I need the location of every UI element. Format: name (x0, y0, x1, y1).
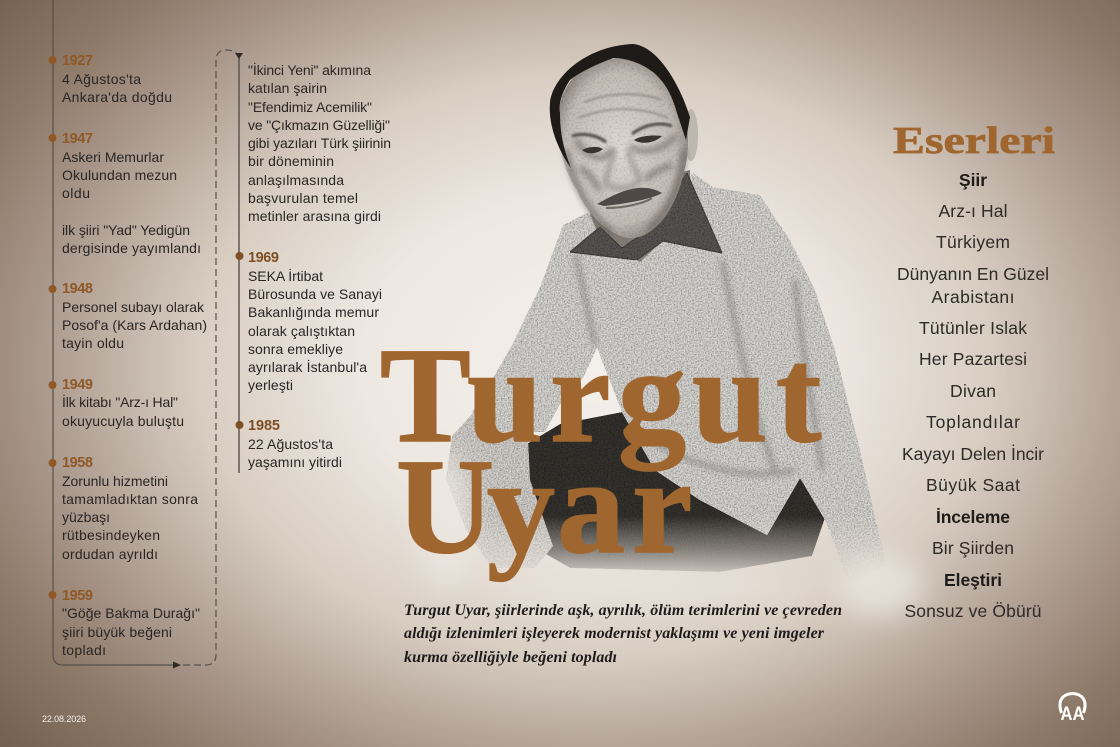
1958 entry: 1958 (62, 455, 93, 471)
study works (932, 507, 1014, 558)
poetry works: Divan (950, 381, 996, 401)
1969 entry: 1969 (248, 250, 279, 266)
1985 entry (248, 418, 342, 470)
1947 entry: dergisinde yayımlandı (62, 240, 201, 256)
criticism works (904, 570, 1042, 621)
1959 entry: "Göğe Bakma Durağı" (62, 605, 200, 621)
poetry works: Arabistanı (932, 287, 1014, 307)
sweater (472, 173, 886, 585)
1949 entry: 1949 (62, 377, 93, 393)
title line: Turgut: Turgut (380, 321, 821, 471)
1948 entry: tayin oldu (62, 335, 124, 351)
sweater folds (575, 255, 822, 474)
poetry works: Şiir (959, 170, 987, 190)
criticism works: Eleştiri (944, 570, 1002, 590)
brows and eyes (572, 124, 672, 142)
1958 entry (62, 455, 198, 562)
1949 entry (62, 377, 184, 429)
1958 entry: Zorunlu hizmetini (62, 473, 168, 489)
1959 entry: şiiri büyük beğeni (62, 624, 172, 640)
1959 entry: topladı (62, 642, 106, 658)
1969 entry: SEKA İrtibat (248, 267, 323, 284)
Ikinci Yeni paragraph: "İkinci Yeni" akımına (248, 61, 371, 78)
ear (687, 109, 698, 161)
Ikinci Yeni paragraph: gibi yazıları Türk şiirinin (248, 135, 391, 151)
1947 entry: ilk şiiri "Yad" Yedigün (62, 222, 190, 238)
hand and knee (446, 412, 553, 568)
1969 entry: olarak çalıştıktan (248, 323, 355, 339)
1969 entry: Bürosunda ve Sanayi (248, 286, 382, 302)
works list (893, 120, 1055, 621)
poetry works: Dünyanın En Güzel (897, 264, 1049, 284)
1927 entry: 1927 (62, 53, 93, 69)
face shading (566, 135, 684, 232)
moustache (597, 188, 662, 206)
Ikinci Yeni paragraph: başvurulan temel (248, 190, 358, 206)
1948 entry: 1948 (62, 281, 93, 297)
1985 entry: 22 Ağustos'ta (248, 436, 333, 452)
poetry works (897, 170, 1049, 495)
poetry works: Türkiyem (936, 232, 1010, 252)
portrait photo of Turgut Uyar (446, 44, 886, 585)
1948 entry: Personel subayı olarak (62, 299, 205, 315)
1958 entry: ordudan ayrıldı (62, 546, 158, 562)
Ikinci Yeni paragraph: katılan şairin (248, 80, 327, 96)
1949 entry: okuyucuyla buluştu (62, 413, 184, 429)
main title (380, 321, 821, 582)
timeline dots (48, 56, 244, 599)
1958 entry: yüzbaşı (62, 509, 110, 525)
poetry works: Her Pazartesi (919, 349, 1027, 369)
poetry works: Büyük Saat (926, 475, 1020, 495)
timeline left column (62, 53, 207, 658)
summary text: aldığı izlenimleri işleyerek modernist yaklaşımı ve yeni imgeler (404, 625, 825, 642)
1969 entry (248, 250, 382, 393)
Ikinci Yeni paragraph: ve "Çıkmazın Güzelliği" (248, 117, 390, 133)
1949 entry: İlk kitabı "Arz-ı Hal" (62, 393, 178, 410)
neck (585, 170, 690, 262)
1947 entry: 1947 (62, 131, 93, 147)
trousers (525, 412, 826, 572)
1927 entry: Ankara'da doğdu (62, 89, 172, 105)
Ikinci Yeni paragraph: anlaşılmasında (248, 172, 344, 188)
1985 entry: yaşamını yitirdi (248, 454, 342, 470)
poetry works: Arz-ı Hal (938, 201, 1008, 221)
1947 entry: Askeri Memurlar (62, 149, 164, 165)
Ikinci Yeni paragraph: bir döneminin (248, 153, 334, 169)
1959 entry: 1959 (62, 588, 93, 604)
timeline connector (53, 0, 243, 668)
icon: AA logo: AA (1060, 704, 1085, 725)
forehead lines (578, 94, 668, 118)
1947 entry (62, 131, 201, 256)
summary text: Turgut Uyar, şiirlerinde aşk, ayrılık, ölüm terimlerini ve çevreden (404, 602, 842, 619)
1927 entry: 4 Ağustos'ta (62, 71, 141, 87)
1947 entry: oldu (62, 185, 90, 201)
poetry works: Tütünler Islak (919, 318, 1027, 338)
summary text: kurma özelliğiyle beğeni topladı (404, 649, 617, 666)
1959 entry (62, 588, 200, 658)
criticism works: Sonsuz ve Öbürü (904, 601, 1042, 621)
poetry works: Toplandılar (926, 412, 1020, 432)
poetry works: Kayayı Delen İncir (902, 444, 1044, 464)
date: 22.08.2026 (42, 714, 86, 724)
1969 entry: sonra emekliye (248, 341, 343, 357)
photo edge fades (420, 450, 925, 617)
1969 entry: ayrılarak İstanbul'a (248, 358, 367, 375)
title line: Uyar: Uyar (396, 432, 692, 582)
1958 entry: rütbesindeyken (62, 527, 160, 543)
study works: İnceleme (936, 507, 1010, 527)
nose shadow (606, 150, 640, 188)
study works: Bir Şiirden (932, 538, 1014, 558)
works heading: Eserleri (893, 120, 1055, 162)
1927 entry (62, 53, 172, 105)
Ikinci Yeni paragraph (248, 61, 391, 224)
Ikinci Yeni paragraph: metinler arasına girdi (248, 208, 381, 224)
1969 entry: yerleşti (248, 377, 293, 393)
1948 entry: Posof'a (Kars Ardahan) (62, 317, 207, 333)
1948 entry (62, 281, 207, 351)
1985 entry: 1985 (248, 418, 280, 434)
mouth (606, 198, 652, 208)
face (558, 58, 688, 238)
shirt collar (570, 173, 722, 260)
hair (550, 44, 690, 168)
icon: AA logo (1060, 694, 1085, 725)
1947 entry: Okulundan mezun (62, 167, 177, 183)
1969 entry: Bakanlığında memur (248, 304, 379, 320)
summary text (404, 602, 842, 666)
timeline right column (248, 61, 391, 470)
Ikinci Yeni paragraph: "Efendimiz Acemilik" (248, 99, 372, 115)
1958 entry: tamamladıktan sonra (62, 491, 198, 507)
